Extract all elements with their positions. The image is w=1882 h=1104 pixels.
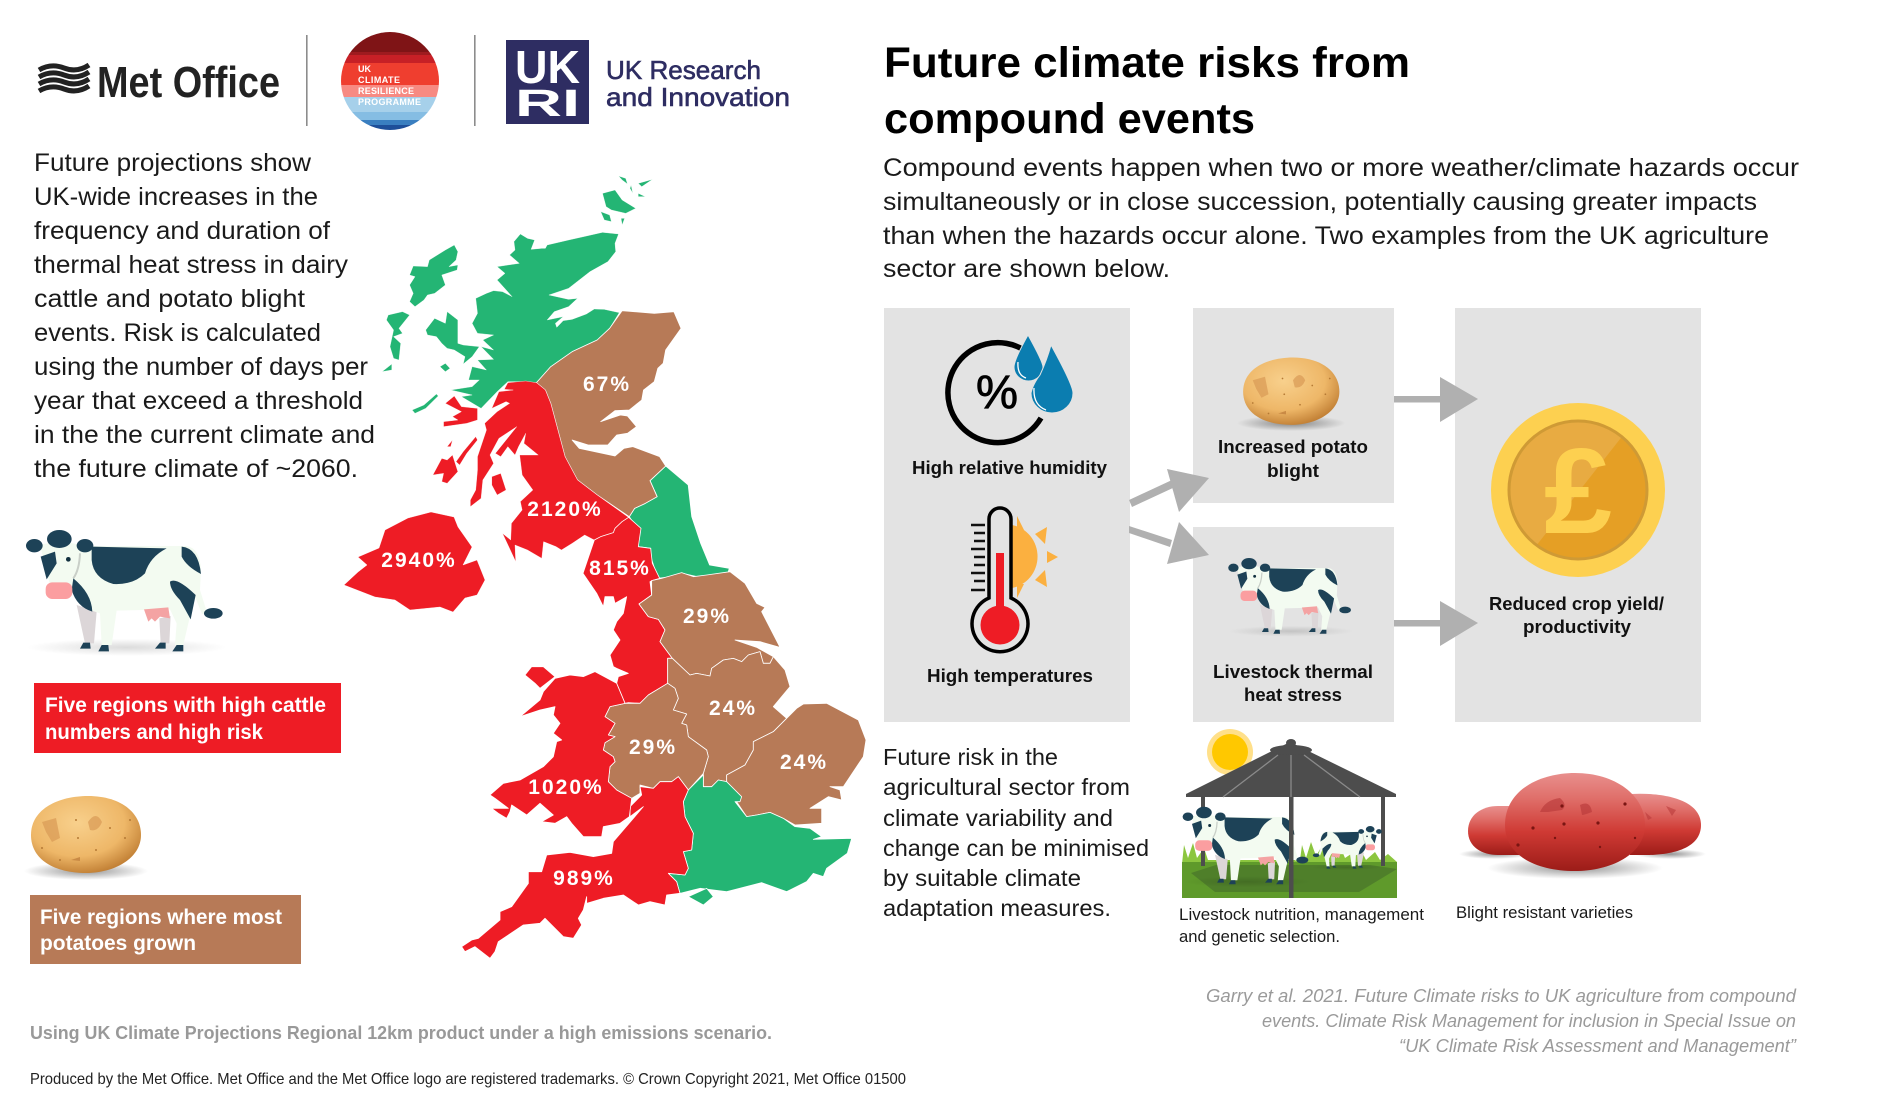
map: eastern Scotland (brown) (536, 311, 681, 517)
map: Northern Ireland (red) (344, 512, 485, 612)
icon: humidity: % (976, 365, 1018, 418)
adaptation paragraph: adaptation measures. (883, 895, 1111, 921)
data source note: Using UK Climate Projections Regional 12km product under a high emissions scenario. (30, 1023, 772, 1043)
left intro paragraph: using the number of days per (34, 353, 368, 381)
logo: UK Research and Innovation: UK Research (606, 55, 761, 85)
map: south-west Scotland (red) (433, 381, 629, 562)
panel: reduced yield (1455, 308, 1701, 722)
logo: UK Research and Innovation (506, 40, 790, 125)
legend: high cattle regions (34, 683, 341, 753)
adaptation paragraph: by suitable climate (883, 865, 1081, 891)
label: high relative humidity: High relative humidity (912, 458, 1107, 478)
map: north-west England (red) (583, 517, 672, 703)
map value labels: 815% (589, 557, 651, 580)
map: South East England (green) (668, 775, 852, 905)
legend: potato regions: potatoes grown (40, 932, 196, 955)
label: increased potato blight (1218, 437, 1368, 481)
label: livestock thermal heat stress: Livestock thermal (1213, 662, 1373, 682)
logo: Met Office (39, 58, 280, 107)
map value labels: 29% (683, 605, 731, 628)
logo: UK Climate Resilience Programme: PROGRAMME (358, 97, 421, 107)
citation (1206, 986, 1797, 1056)
panel: hazards (884, 308, 1130, 722)
label: reduced crop yield: Reduced crop yield/ (1489, 594, 1664, 614)
map value labels: 2120% (527, 498, 603, 521)
intro paragraph: Compound events happen when two or more weather/climate hazards occur (883, 154, 1799, 182)
map value labels (381, 373, 828, 890)
logo: UK Climate Resilience Programme (340, 32, 440, 131)
left intro paragraph: cattle and potato blight (34, 285, 305, 313)
arrow: hazards to blight (1129, 469, 1209, 512)
map: West Midlands (brown) (603, 683, 708, 798)
icon: cattle shelter (1182, 729, 1397, 898)
icon: potato (1237, 358, 1346, 431)
left intro paragraph: year that exceed a threshold (34, 387, 363, 415)
icon: pound coin: £ (1544, 423, 1612, 559)
icon: humidity (948, 335, 1073, 443)
left intro paragraph: thermal heat stress in dairy (34, 251, 349, 279)
title: compound events (884, 95, 1255, 143)
label: livestock thermal heat stress: heat stress (1244, 685, 1342, 705)
left intro paragraph: the future climate of ~2060. (34, 455, 358, 483)
label: increased potato blight: Increased potato (1218, 437, 1368, 457)
adaptation paragraph: climate variability and (883, 805, 1113, 831)
label: reduced crop yield (1489, 594, 1664, 637)
map value labels: 24% (709, 697, 757, 720)
intro paragraph (883, 154, 1799, 283)
icon: thermometer and sun (971, 508, 1058, 652)
logo: UK Research and Innovation: UK (515, 41, 580, 93)
logo: UK Climate Resilience Programme: RESILIENCE (358, 86, 414, 96)
map: East Midlands (brown) (668, 652, 790, 787)
icon: potato (left) (24, 796, 148, 880)
caption: livestock (1179, 905, 1424, 946)
intro paragraph: sector are shown below. (883, 255, 1170, 283)
citation: Garry et al. 2021. Future Climate risks to UK agriculture from compound (1206, 986, 1797, 1006)
icon: cow (left) (26, 530, 227, 656)
map: East of England (brown) (727, 703, 866, 825)
adaptation paragraph: agricultural sector from (883, 774, 1130, 800)
label: reduced crop yield: productivity (1523, 617, 1631, 637)
label: high temperatures: High temperatures (927, 666, 1093, 686)
map: Yorkshire and Humber (brown) (639, 572, 780, 676)
map of the UK regions (344, 176, 866, 958)
adaptation paragraph: change can be minimised (883, 835, 1149, 861)
label: livestock thermal heat stress (1213, 662, 1373, 705)
logo: UK Research and Innovation: and Innovation (606, 82, 790, 112)
legend: potato regions (30, 895, 301, 964)
title (884, 39, 1410, 143)
arrow: hazards to heat stress (1129, 522, 1209, 564)
intro paragraph: than when the hazards occur alone. Two examples from the UK agriculture (883, 222, 1769, 250)
icon: cow (1228, 558, 1353, 637)
left intro paragraph: in the the current climate and (34, 421, 375, 449)
map value labels: 1020% (528, 776, 604, 799)
caption: blight resistant: Blight resistant varieties (1456, 903, 1633, 922)
copyright line: Produced by the Met Office. Met Office and the Met Office logo are registered trademarks. © Crown Copyright 2021, Met Office 01500 (30, 1071, 906, 1088)
map: Wales (red) (490, 667, 632, 837)
legend: high cattle regions: Five regions with high cattle (45, 694, 326, 717)
map value labels: 2940% (381, 549, 457, 572)
intro paragraph: simultaneously or in close succession, potentially causing greater impacts (883, 188, 1757, 216)
logo: UK Research and Innovation: RI (515, 83, 580, 125)
left intro paragraph: frequency and duration of (34, 217, 330, 245)
map value labels: 29% (629, 736, 677, 759)
map: South West England (red) (462, 777, 693, 958)
panel: livestock heat stress (1193, 527, 1394, 722)
panel: potato blight (1193, 308, 1394, 503)
legend: high cattle regions: numbers and high risk (45, 721, 263, 744)
left intro paragraph: events. Risk is calculated (34, 319, 321, 347)
caption: livestock: Livestock nutrition, management (1179, 905, 1424, 924)
logo: Met Office: Met Office (97, 58, 280, 107)
logo: UK Climate Resilience Programme: UK (358, 64, 372, 74)
left intro paragraph (34, 149, 375, 483)
map value labels: 989% (553, 867, 615, 890)
adaptation paragraph: Future risk in the (883, 744, 1058, 770)
map value labels: 67% (583, 373, 631, 396)
legend: potato regions: Five regions where most (40, 906, 282, 929)
map: Scotland north and islands (green) (382, 176, 652, 413)
left intro paragraph: Future projections show (34, 149, 312, 177)
adaptation paragraph (883, 744, 1149, 921)
map value labels: 24% (780, 751, 828, 774)
arrow: heat stress to yield (1394, 601, 1478, 646)
icon: pound coin (1491, 403, 1665, 577)
title: Future climate risks from (884, 39, 1410, 87)
logo: UK Climate Resilience Programme: CLIMATE (358, 75, 400, 85)
icon: red potatoes (1459, 773, 1706, 879)
label: increased potato blight: blight (1267, 461, 1319, 481)
citation: “UK Climate Risk Assessment and Management” (1399, 1036, 1797, 1056)
citation: events. Climate Risk Management for inclusion in Special Issue on (1262, 1011, 1796, 1031)
left intro paragraph: UK-wide increases in the (34, 183, 318, 211)
caption: livestock: and genetic selection. (1179, 927, 1340, 946)
arrow: blight to yield (1394, 377, 1478, 422)
map: north-east England (green) (629, 466, 729, 578)
